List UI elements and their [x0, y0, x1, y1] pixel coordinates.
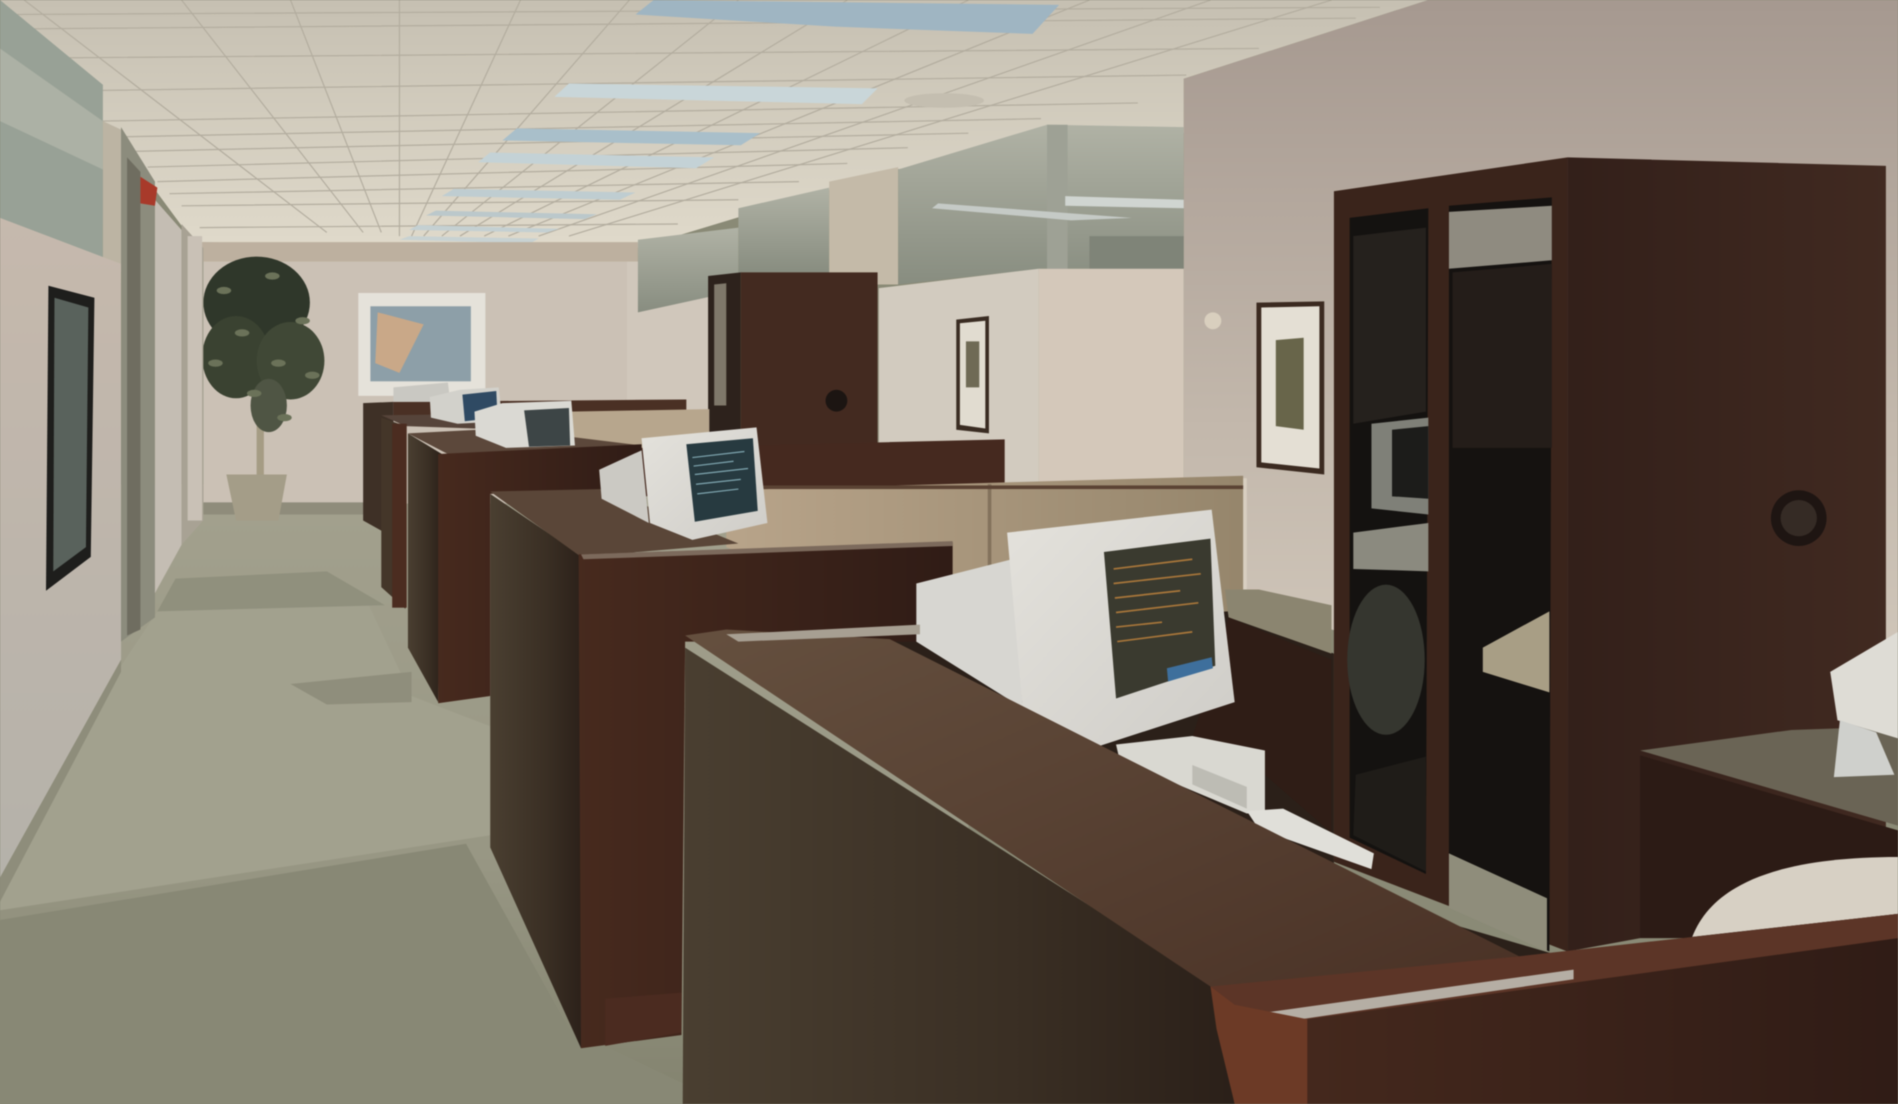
cabinet right glass door [1449, 197, 1552, 951]
cabinet left glass door [1347, 208, 1428, 874]
large glass-front cabinet [1334, 157, 1886, 951]
large monitor on front workstation [916, 510, 1235, 747]
floor carpet [0, 484, 968, 1104]
ceiling light panels [399, 0, 1059, 243]
glass clerestory and column, upper right [638, 125, 1184, 312]
central dark cabinet [708, 272, 878, 450]
back wall [200, 242, 709, 514]
right wall [1184, 0, 1898, 775]
brown and tan partitions [642, 439, 1243, 642]
framed picture on right wall [1256, 301, 1324, 475]
ceiling with tile grid [0, 0, 1428, 248]
left wall with glass and door frames [0, 0, 203, 902]
distant workstation row [363, 383, 709, 609]
front workstation [683, 625, 1898, 1104]
framed picture on back wall [358, 293, 485, 396]
chair back [1692, 857, 1898, 937]
third workstation [408, 401, 642, 703]
small picture on partition [956, 316, 989, 433]
desk beside large cabinet [1192, 590, 1332, 833]
second workstation [490, 489, 953, 1048]
framed picture on left wall [46, 286, 94, 591]
cabinet ventilation grille [1771, 490, 1827, 546]
monitor on second workstation [599, 427, 767, 540]
white partitions [879, 269, 1184, 487]
shadowed gap behind front workstation [890, 611, 1561, 987]
potted plant [202, 257, 324, 521]
printer [1830, 632, 1898, 777]
computer base unit and keyboard [1116, 736, 1374, 869]
right-hand desk and chair [1640, 632, 1898, 938]
